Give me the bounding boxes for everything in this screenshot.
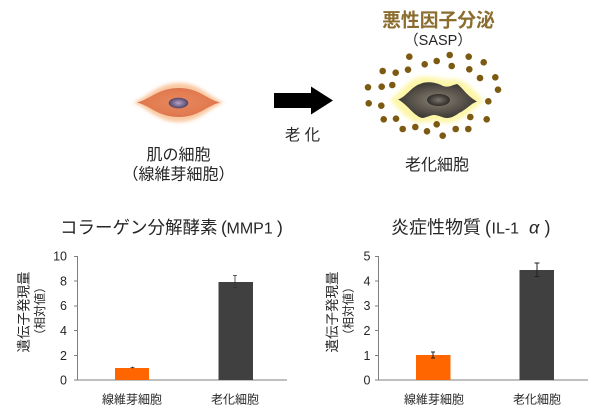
y axis title: MMP1 [16,272,47,352]
heading: SASP: （SASP） [404,32,472,49]
chart title: IL-1 alpha: ) [544,218,550,238]
y axis tick labels: IL-1 alpha: 1 [364,349,371,363]
y axis tick labels: MMP1 [53,250,67,388]
y axis tick labels: IL-1 alpha: 4 [364,274,371,288]
y axis title: IL-1 alpha: （相対値） [340,281,356,341]
y axis tick labels: IL-1 alpha: 5 [364,250,371,264]
chart title: MMP1: コラーゲン分解酵素 [60,218,218,238]
x axis labels: MMP1 [102,392,259,406]
bar chart: MMP1 [16,218,287,406]
y axis tick labels: MMP1: 10 [53,250,67,264]
icon: normal skin cell [133,83,224,122]
y axis title: IL-1 alpha [325,272,356,352]
icon: SASP secreted factors [365,52,501,139]
chart title: MMP1: ( [221,218,227,238]
axes: MMP1 [74,256,287,380]
y axis tick labels: IL-1 alpha [364,250,371,388]
y axis tick labels: MMP1: 8 [60,274,67,288]
y axis tick labels: IL-1 alpha: 3 [364,299,371,313]
y axis title: MMP1: （相対値） [32,281,47,341]
chart title: IL-1 alpha: ( [485,218,491,238]
error bars: IL-1 alpha [431,263,540,358]
x axis labels: IL-1 alpha: 老化細胞 [513,392,561,406]
error bars: MMP1 [130,276,237,368]
y axis title: MMP1: 遺伝子発現量 [16,272,32,352]
label: aging: 老 化 [285,126,320,144]
chart title: MMP1: MMP1 [226,220,273,238]
chart title: IL-1 alpha: 炎症性物質 [391,218,481,238]
label: senescent cell: 老化細胞 [405,156,469,174]
y axis tick labels: MMP1: 6 [60,299,67,313]
label: normal cell: （線維芽細胞） [122,166,235,184]
x axis labels: MMP1: 老化細胞 [211,392,259,406]
icon: senescent cell [390,77,484,123]
axes: IL-1 alpha [375,256,588,380]
heading: SASP: 悪性因子分泌 [382,10,495,30]
bar chart: IL-1 alpha [325,218,588,406]
x axis labels: IL-1 alpha: 線維芽細胞 [404,392,464,406]
x axis labels: IL-1 alpha [404,392,561,406]
chart title: MMP1: ) [277,218,283,238]
y axis title: IL-1 alpha: 遺伝子発現量 [325,272,340,352]
arrow: aging [274,86,333,114]
label: normal cell: 肌の細胞 [146,146,211,164]
y axis tick labels: MMP1: 0 [60,374,67,388]
chart title: IL-1 alpha: α [529,218,540,238]
y axis tick labels: MMP1: 4 [60,324,67,338]
label: normal cell [122,146,235,184]
bar: fibroblast MMP1 [115,368,149,380]
bar: senescent IL-1 alpha [520,270,554,380]
bar: fibroblast IL-1 alpha [416,355,450,380]
chart title: IL-1 alpha: IL-1 [492,220,519,238]
bar: senescent MMP1 [218,282,253,380]
y axis tick labels: MMP1: 2 [60,349,67,363]
y axis tick labels: IL-1 alpha: 0 [364,374,371,388]
heading: SASP [382,10,495,49]
y axis tick labels: IL-1 alpha: 2 [364,324,371,338]
x axis labels: MMP1: 線維芽細胞 [102,392,162,406]
